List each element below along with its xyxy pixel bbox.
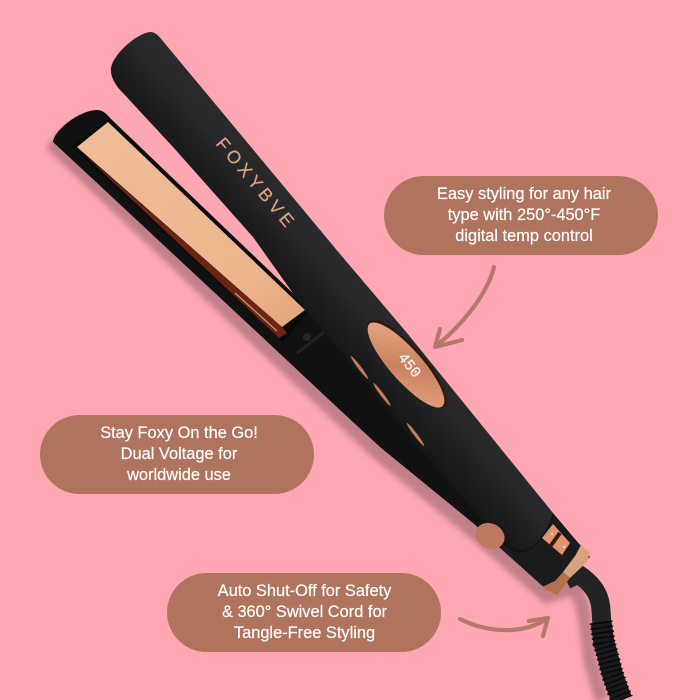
cast shadow (46, 130, 602, 700)
callout: dual voltage: Stay Foxy On the Go! (100, 424, 258, 442)
lower plate recess (72, 118, 309, 342)
brand name: FOXYBVE (212, 134, 298, 231)
lower plate rose gold (77, 122, 305, 327)
callout: auto shut-off: Auto Shut-Off for Safety (218, 582, 391, 600)
callout: temp control: Easy styling for any hair (437, 185, 611, 203)
callout: auto shut-off (167, 573, 441, 652)
callout: auto shut-off: & 360° Swivel Cord for (222, 603, 387, 621)
hinge button (303, 333, 311, 341)
callout: temp control (384, 176, 658, 255)
handle collar (480, 515, 590, 590)
lower arm and handle body (53, 110, 590, 590)
display digits: 450 (394, 350, 424, 382)
gold ring (542, 545, 590, 595)
side buttons (349, 355, 426, 447)
callout: temp control: digital temp control (455, 227, 593, 245)
swivel switch (542, 524, 570, 555)
callout: dual voltage (40, 415, 314, 494)
upper arm (111, 32, 590, 595)
callout: temp control: type with 250°-450°F (448, 206, 600, 224)
arrow: to cord (460, 618, 548, 636)
lower plate dark side (77, 148, 287, 338)
round rose gold button (471, 518, 509, 554)
callout: dual voltage: worldwide use (127, 466, 231, 484)
temperature display (356, 310, 458, 418)
cord (566, 574, 622, 700)
callout: auto shut-off: Tangle-Free Styling (234, 624, 375, 642)
callout: dual voltage: Dual Voltage for (121, 445, 237, 463)
arrow: to display (435, 267, 494, 347)
